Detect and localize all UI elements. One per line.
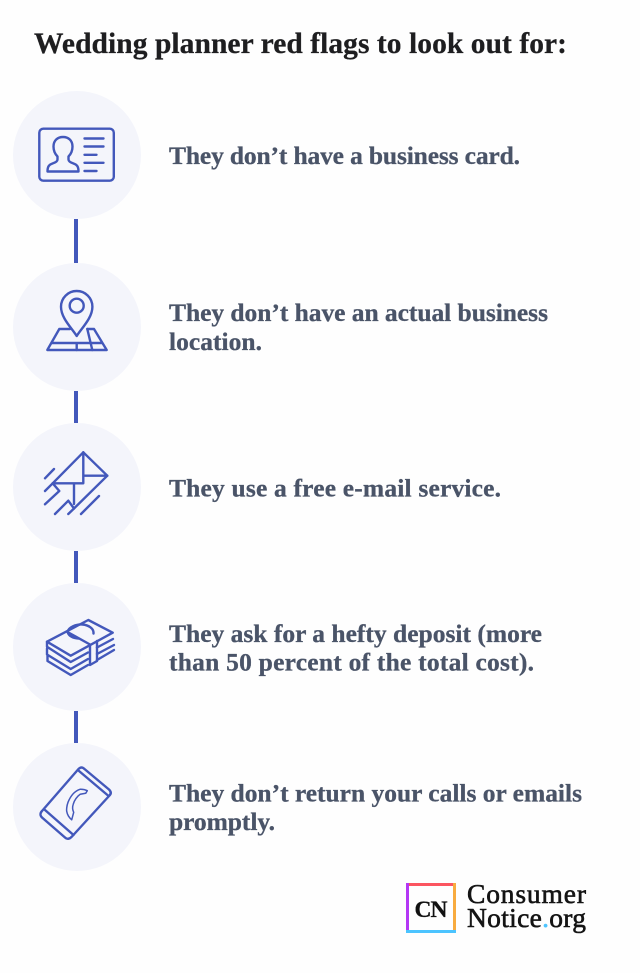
icon circle: envelope [13, 423, 141, 551]
logo: ConsumerNotice.org [406, 878, 586, 933]
text: business location: location. [169, 327, 262, 356]
icon: smartphone [40, 768, 111, 839]
icon: map pin [47, 291, 107, 350]
panel: business location item [13, 263, 548, 391]
panel: unreturned calls item [13, 743, 582, 871]
text: calls: promptly. [169, 807, 275, 836]
text: free e-mail: They use a free e-mail service. [169, 474, 501, 502]
panel: free e-mail item [13, 423, 501, 551]
text: business location [169, 298, 548, 356]
logo mark [406, 883, 456, 933]
text: business location: They don’t have an actual business [169, 298, 548, 327]
connector lines [74, 219, 78, 743]
text: deposit [169, 619, 542, 676]
icon circle: business card [13, 91, 141, 219]
panel: business card item [13, 91, 520, 219]
text: deposit: They ask for a hefty deposit (more [169, 619, 542, 648]
icon circle: phone [13, 743, 141, 871]
logo wordmark: Notice.org [467, 902, 586, 933]
logo mark: CN [414, 897, 448, 923]
icon circle: money [13, 583, 141, 711]
icon: business card [39, 129, 114, 181]
icon: stack of money [47, 620, 114, 675]
text: business card: They don’t have a business card. [169, 141, 520, 170]
title: Wedding planner red flags to look out for: [34, 28, 567, 60]
logo wordmark [467, 878, 586, 933]
text: deposit: than 50 percent of the total cost). [169, 648, 534, 676]
icon: flying envelope [45, 452, 107, 514]
panel: deposit item [13, 583, 542, 711]
logo wordmark: Consumer [467, 878, 586, 909]
text: calls: They don’t return your calls or emails [169, 778, 582, 808]
icon circle: map pin [13, 263, 141, 391]
text: calls [169, 778, 582, 836]
